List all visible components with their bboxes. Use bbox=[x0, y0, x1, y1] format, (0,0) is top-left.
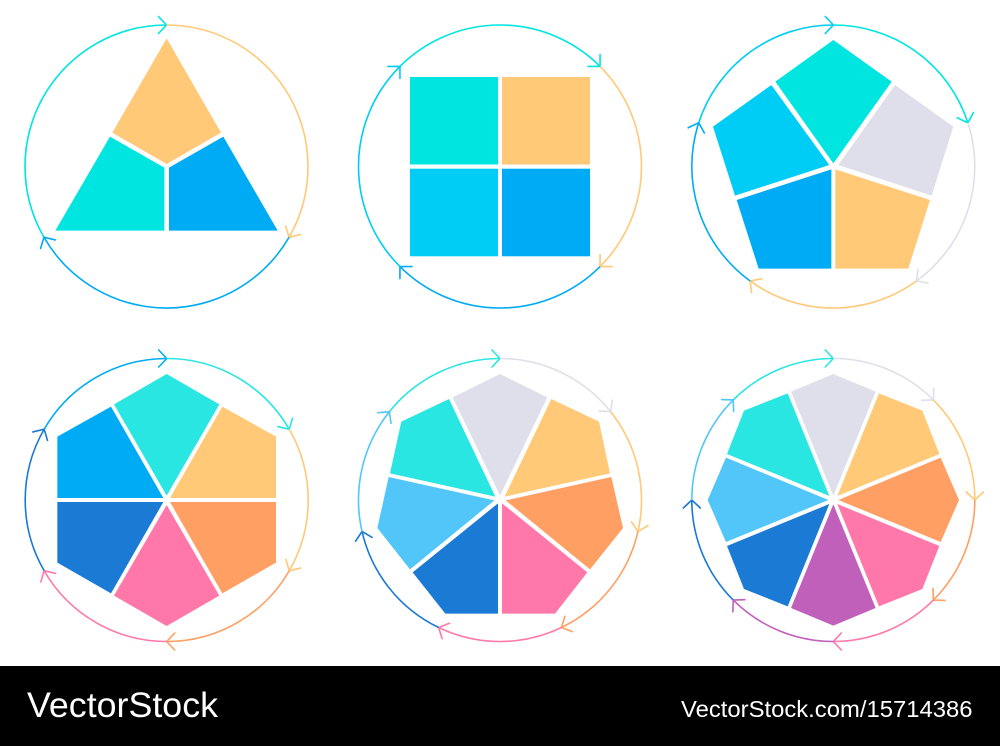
segment: grey right bbox=[838, 85, 953, 196]
arrow: light blue bbox=[331, 331, 669, 669]
arrow: teal bbox=[633, 300, 1000, 700]
panel: pentagon diagram with 5 segments bbox=[636, 0, 1000, 364]
arrow: dark orange bbox=[331, 331, 669, 669]
arrow: teal bbox=[692, 25, 976, 308]
segment: light blue bbox=[377, 477, 494, 569]
arrow: light blue bbox=[692, 358, 975, 642]
cycle arrows ring bbox=[0, 0, 360, 360]
footer logo text: VectorStock bbox=[27, 686, 219, 725]
segment: orange top bbox=[112, 38, 221, 164]
arrow: dark blue bbox=[633, 300, 1000, 700]
panel: octagon diagram with 8 segments bbox=[633, 300, 1000, 700]
segment: dark orange lower right bbox=[170, 502, 276, 593]
cycle arrows ring bbox=[636, 0, 1000, 364]
arrow: orange bbox=[636, 0, 1000, 364]
segment: orange bottom right bbox=[835, 169, 930, 269]
cycle arrows ring bbox=[300, 0, 700, 367]
arrow: dark blue bbox=[0, 307, 360, 693]
arrow: purple bbox=[692, 358, 975, 642]
segment: teal bbox=[390, 399, 495, 497]
panel: heptagon diagram with 7 segments bbox=[301, 301, 699, 699]
segment: grey top bbox=[791, 374, 876, 496]
arrow: cyan bbox=[300, 0, 700, 367]
cycle arrows ring bbox=[0, 307, 360, 693]
panel: square diagram with 4 segments bbox=[300, 0, 700, 367]
arrow: pink bbox=[25, 358, 308, 642]
segment: cyan bottom left bbox=[410, 169, 498, 256]
arrow: pink bbox=[311, 311, 689, 689]
arrow: blue bbox=[0, 307, 360, 693]
segment: pink bbox=[502, 503, 587, 614]
heptagon segments bbox=[377, 374, 623, 614]
arrow: dark blue bbox=[311, 311, 689, 689]
arrow: light orange bbox=[301, 301, 699, 699]
segment: blue upper left bbox=[57, 407, 163, 498]
segment: teal bbox=[727, 393, 829, 496]
arrow: dark orange bbox=[0, 307, 360, 693]
arrow: teal bbox=[25, 358, 308, 642]
footer bar bbox=[0, 666, 1000, 746]
footer url text: VectorStock.com/15714386 bbox=[681, 696, 972, 722]
octagon segments bbox=[708, 374, 959, 626]
segment: grey top bbox=[453, 374, 547, 496]
panel: hexagon diagram with 6 segments bbox=[0, 307, 360, 693]
triangle segments bbox=[55, 38, 278, 231]
segment: orange top right bbox=[502, 77, 590, 164]
segment: cyan left bbox=[713, 85, 829, 196]
arrow: pink bbox=[633, 300, 1000, 700]
segment: blue right bbox=[169, 137, 278, 231]
segment: blue bottom right bbox=[502, 169, 590, 256]
segment: pink bbox=[837, 504, 939, 606]
segment: light orange upper right bbox=[170, 407, 276, 498]
arrow: teal bbox=[300, 0, 700, 367]
arrow: grey bbox=[358, 358, 642, 642]
arrow: blue bbox=[300, 0, 700, 367]
arrow: orange bbox=[300, 0, 700, 367]
segment: light blue bbox=[708, 458, 828, 542]
arrow: grey bbox=[655, 0, 1000, 345]
cycle arrows ring bbox=[301, 301, 699, 699]
segment: dark orange bbox=[506, 477, 623, 569]
segment: pink bottom bbox=[114, 505, 219, 626]
arrow: light orange bbox=[633, 300, 1000, 700]
arrow: teal bbox=[301, 301, 699, 699]
cycle arrows ring bbox=[633, 300, 1000, 700]
arrow: blue bbox=[636, 0, 1000, 364]
segment: light orange bbox=[505, 399, 610, 497]
square segments bbox=[410, 77, 590, 256]
segment: teal left bbox=[55, 137, 164, 231]
segment: dark orange bbox=[838, 458, 959, 542]
panel: triangle diagram with 3 segments bbox=[0, 0, 360, 360]
arrow: teal bbox=[0, 0, 360, 360]
segment: purple bbox=[791, 504, 876, 626]
segment: dark blue bbox=[413, 503, 498, 614]
hexagon segments bbox=[57, 374, 276, 626]
segment: teal top bbox=[114, 374, 219, 496]
segment: dark blue lower left bbox=[57, 502, 163, 593]
arrow: blue bbox=[0, 0, 360, 360]
segment: blue bottom left bbox=[737, 169, 831, 269]
arrow: light orange bbox=[0, 307, 360, 693]
arrow: orange bbox=[25, 25, 308, 308]
arrow: grey bbox=[692, 358, 975, 642]
segment: dark blue bbox=[727, 504, 829, 606]
segment: light orange bbox=[837, 393, 939, 496]
arrow: dark orange bbox=[692, 358, 975, 642]
segment: teal top left bbox=[410, 77, 498, 164]
arrow: cyan bbox=[655, 0, 1000, 345]
pentagon segments bbox=[713, 40, 953, 269]
segment: teal top bbox=[775, 40, 892, 163]
